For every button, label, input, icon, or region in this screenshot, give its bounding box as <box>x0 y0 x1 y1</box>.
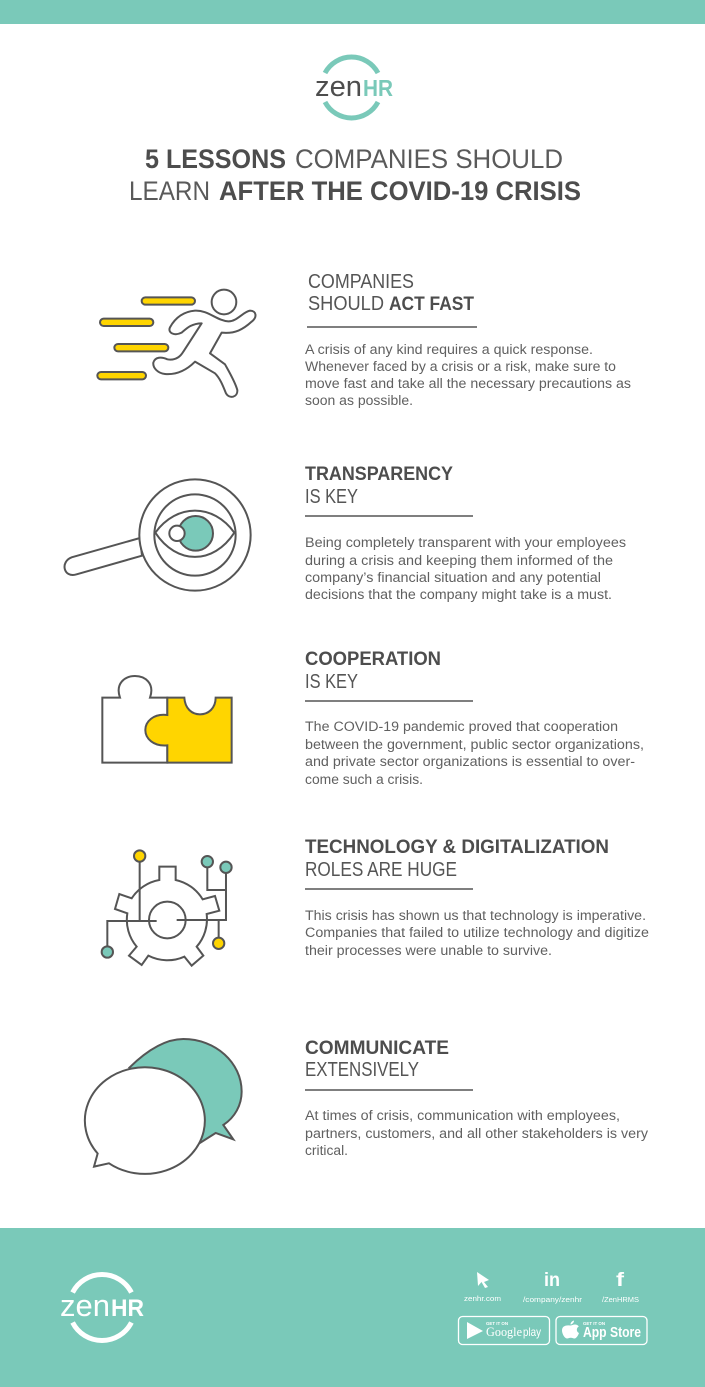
heading: IS KEY <box>305 486 358 508</box>
button: google play: GET IT ON <box>486 1321 508 1326</box>
heading: COOPERATION <box>305 648 441 670</box>
logo: ZenHR white: zen <box>60 1288 110 1323</box>
button: google play: Google <box>486 1324 522 1339</box>
body text: A crisis of any kind requires a quick response. <box>305 342 593 357</box>
body text: and private sector organizations is essential to over- <box>305 754 635 769</box>
body text <box>305 719 644 787</box>
footer links: zenhr.com <box>464 1296 501 1303</box>
body text <box>305 535 626 602</box>
panel: act fast <box>97 271 631 408</box>
heading <box>305 463 453 508</box>
top band <box>0 0 705 24</box>
icon: linkedin: in <box>544 1270 560 1291</box>
logo: ZenHR: zen <box>315 71 362 103</box>
heading <box>308 271 474 315</box>
logo: ZenHR white <box>60 1274 144 1341</box>
logo: ZenHR white: HR <box>111 1295 144 1322</box>
title: AFTER THE COVID-19 CRISIS <box>219 176 581 206</box>
icon: gear with circuit nodes <box>102 850 232 966</box>
panel: technology <box>102 836 649 966</box>
title <box>129 144 581 206</box>
button: google play: play <box>523 1325 541 1339</box>
panel: footer <box>0 1228 705 1387</box>
body text: company’s financial situation and any potential <box>305 570 601 585</box>
body text <box>305 342 631 408</box>
logo: ZenHR: HR <box>363 75 393 101</box>
footer links: /company/zenhr <box>523 1297 583 1304</box>
body text: soon as possible. <box>305 393 413 408</box>
icon: speech bubbles <box>85 1039 242 1174</box>
heading: ROLES ARE HUGE <box>305 859 457 881</box>
body text: Companies that failed to utilize technology and digitize <box>305 925 649 940</box>
body text: Being completely transparent with your employees <box>305 535 626 550</box>
body text: Whenever faced by a crisis or a risk, make sure to <box>305 359 616 374</box>
button: app store: App Store <box>583 1324 641 1341</box>
heading: SHOULD <box>308 293 384 315</box>
title: LEARN <box>129 176 210 206</box>
body text: between the government, public sector organizations, <box>305 737 644 752</box>
icon: puzzle pieces <box>102 676 232 763</box>
panel: cooperation <box>102 648 644 787</box>
icon: magnifying glass with eye <box>65 479 251 591</box>
body text: decisions that the company might take is a must. <box>305 587 612 602</box>
heading <box>305 836 609 881</box>
heading <box>305 1037 449 1081</box>
body text: partners, customers, and all other stakeholders is very <box>305 1126 648 1141</box>
title: 5 LESSONS <box>145 144 286 174</box>
button: google play <box>458 1316 550 1344</box>
logo: ZenHR <box>315 57 393 118</box>
footer links <box>464 1296 639 1304</box>
heading <box>305 648 441 693</box>
heading: COMMUNICATE <box>305 1037 449 1059</box>
panel: communicate <box>85 1037 648 1174</box>
body text <box>305 1108 648 1158</box>
title: COMPANIES SHOULD <box>295 144 563 174</box>
body text: This crisis has shown us that technology is imperative. <box>305 908 646 923</box>
panel: transparency <box>65 463 626 602</box>
body text: At times of crisis, communication with employees, <box>305 1108 620 1123</box>
body text: move fast and take all the necessary precautions as <box>305 376 631 391</box>
footer links: /ZenHRMS <box>602 1297 639 1304</box>
heading: EXTENSIVELY <box>305 1059 419 1081</box>
body text <box>305 908 649 958</box>
icon: running person <box>97 290 255 397</box>
button: app store <box>556 1316 647 1344</box>
body text: their processes were unable to survive. <box>305 943 552 958</box>
button: app store: GET IT ON <box>583 1321 605 1326</box>
heading: TRANSPARENCY <box>305 463 453 485</box>
heading: IS KEY <box>305 671 358 693</box>
heading: COMPANIES <box>308 271 414 293</box>
heading: TECHNOLOGY & DIGITALIZATION <box>305 836 609 858</box>
body text: critical. <box>305 1143 348 1158</box>
body text: during a crisis and keeping them informed of the <box>305 553 613 568</box>
heading: ACT FAST <box>389 293 474 315</box>
body text: come such a crisis. <box>305 772 423 787</box>
icon: cursor <box>477 1272 489 1288</box>
body text: The COVID-19 pandemic proved that cooperation <box>305 719 618 734</box>
icon: facebook: f <box>616 1270 625 1291</box>
